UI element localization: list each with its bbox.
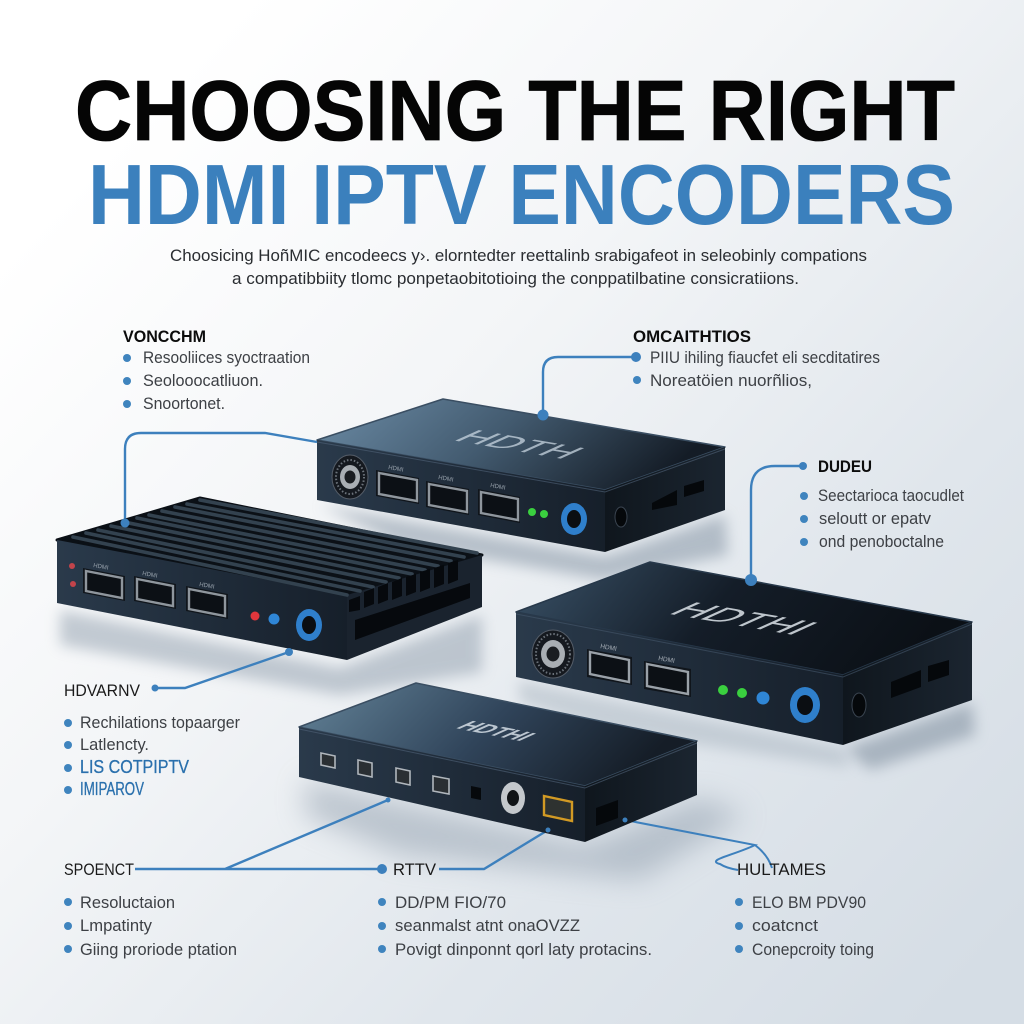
callout: VONCCHM: Snoortonet. (143, 395, 225, 413)
device: right encoder (516, 562, 972, 745)
subtitle: Choosicing HoñMIC encodeecs y›. elorntedter reettalinb srabigafeot in seleobinly compations (170, 246, 867, 265)
device: heatsink encoder (57, 498, 482, 660)
callout: DUDEU (800, 457, 964, 551)
HDMI ports: HDMI (199, 582, 215, 591)
subtitle (170, 246, 867, 288)
blue jack (296, 609, 322, 641)
callout: HULTAMES: Conepcroity toing (752, 941, 874, 959)
callout: VONCCHM: Seolooocatliuon. (143, 372, 263, 390)
callout: OMCAITHTIOS (633, 327, 880, 390)
connector lines (125, 357, 803, 870)
callout: HDVARNV (64, 681, 240, 799)
title: CHOOSING THE RIGHT (75, 64, 955, 159)
HDMI ports (376, 465, 520, 523)
cooling fins (73, 500, 477, 595)
callout: HDVARNV: Latlencty. (80, 736, 149, 754)
HDMI ports (587, 643, 691, 697)
callout: HDVARNV: HDVARNV (64, 681, 141, 700)
shadows and reflections (60, 505, 975, 880)
status lights (528, 508, 548, 518)
HDMI ports: HDMI (658, 655, 675, 665)
callout: HULTAMES (735, 860, 874, 959)
callout: RTTV: RTTV (393, 860, 437, 879)
audio port (471, 786, 481, 800)
callout: HULTAMES: coatcnct (752, 917, 818, 935)
blue jack (561, 503, 587, 535)
connector: coaxial dial (332, 455, 368, 499)
callout: OMCAITHTIOS: Noreatöien nuorñlios, (650, 372, 812, 390)
status lights (718, 685, 770, 704)
device label: HDTH: HDTH (444, 426, 595, 463)
callout: HDVARNV: LIS COTPIPTV (80, 757, 189, 777)
callout: RTTV (378, 860, 652, 959)
callout: DUDEU: DUDEU (818, 457, 872, 476)
callout: SPOENCT: Lmpatinty (80, 917, 153, 935)
HDMI ports (83, 563, 228, 619)
connector dots (120, 352, 807, 874)
side vent (349, 560, 470, 640)
callout: RTTV: seanmalst atnt onaOVZZ (395, 917, 580, 935)
side ports (852, 660, 949, 717)
callout: SPOENCT: SPOENCT (64, 860, 134, 879)
callout: DUDEU: seloutt or epatv (819, 510, 932, 528)
HDMI ports: HDMI (490, 483, 506, 492)
callout: HULTAMES: ELO BM PDV90 (752, 894, 866, 912)
HDMI ports: HDMI (93, 563, 109, 572)
callout: HDVARNV: IMIPAROV (80, 779, 144, 799)
indicator lights (69, 563, 280, 624)
device: bottom encoder (299, 683, 697, 842)
callout: SPOENCT: Giing proriode ptation (80, 941, 237, 959)
device label: HDTHI: HDTHI (449, 719, 542, 744)
callout: OMCAITHTIOS: PIIU ihiling fiaucfet eli secditatires (650, 349, 880, 367)
callout: RTTV: DD/PM FIO/70 (395, 894, 506, 912)
HDMI ports: HDMI (438, 475, 454, 484)
silver jack (501, 782, 525, 814)
callout: VONCCHM (123, 327, 310, 413)
HDMI ports: HDMI (142, 571, 158, 580)
callout: DUDEU: ond penoboctalne (819, 533, 944, 551)
HDMI ports: HDMI (388, 465, 404, 474)
connector: coaxial dial (532, 630, 574, 678)
title: HDMI IPTV ENCODERS (88, 148, 955, 243)
callout: HULTAMES: HULTAMES (737, 860, 826, 879)
callout: OMCAITHTIOS: OMCAITHTIOS (633, 327, 751, 346)
device label: HDTHI: HDTHI (658, 598, 829, 639)
callout: VONCCHM: Resooliices syoctraation (143, 349, 310, 367)
callout: SPOENCT (64, 860, 237, 959)
callout: HDVARNV: Rechilations topaarger (80, 714, 240, 732)
callout: SPOENCT: Resoluctaion (80, 894, 175, 912)
small ports (321, 753, 449, 794)
side ports (615, 480, 704, 527)
device: top encoder (317, 399, 725, 552)
gold ethernet port (544, 796, 572, 821)
callout: RTTV: Povigt dinponnt qorl laty protacins. (395, 941, 652, 959)
title (75, 64, 955, 243)
HDMI ports: HDMI (600, 643, 617, 653)
blue jack (790, 687, 820, 723)
subtitle: a compatibbiity tlomc ponpetaobitotioing the conppatilbatine consicratiions. (232, 269, 799, 288)
callout: VONCCHM: VONCCHM (123, 327, 206, 346)
callout: DUDEU: Seectarioca taocudlet (818, 487, 964, 505)
side port (596, 800, 618, 826)
